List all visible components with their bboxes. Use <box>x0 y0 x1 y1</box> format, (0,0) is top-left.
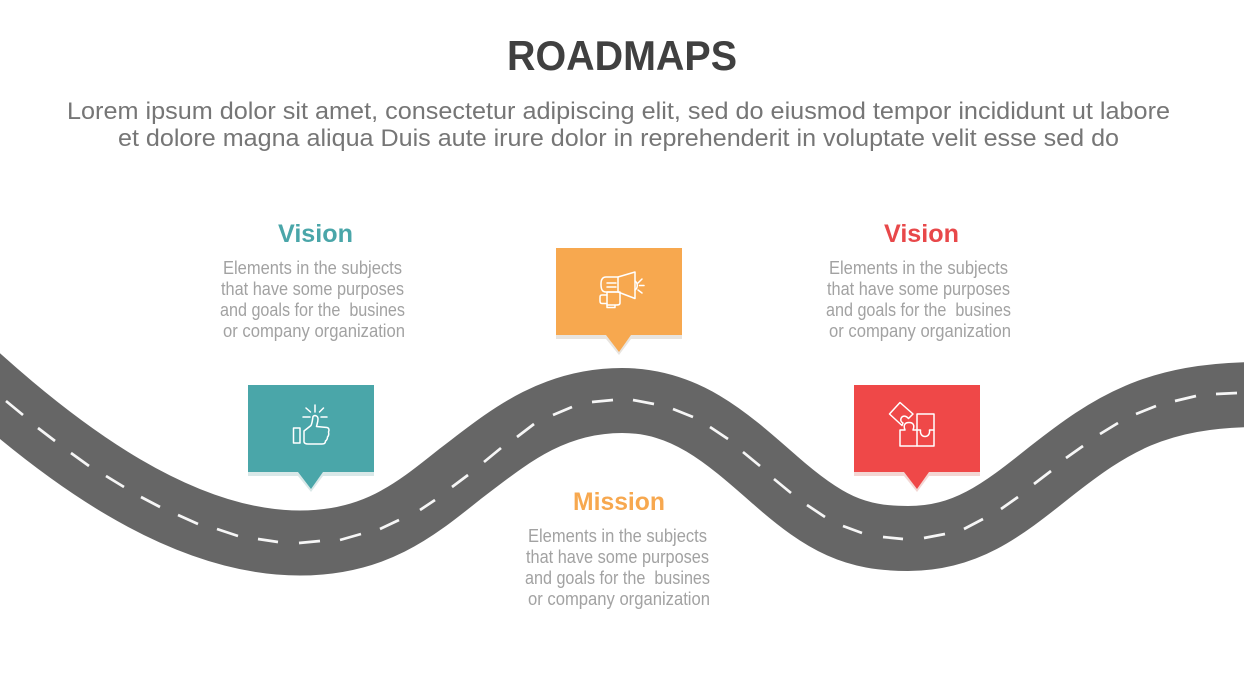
icon: thumbs up <box>294 405 329 444</box>
winding road <box>0 370 1244 543</box>
panel: mission text <box>525 488 710 609</box>
subtitle text block: Lorem ipsum dolor sit amet, consectetur adipiscing elit, sed do eiusmod tempor incididunt ut labore <box>67 98 1170 125</box>
left vision body text: and goals for the busines <box>220 300 405 320</box>
mission body text: Elements in the subjects <box>528 526 707 546</box>
mission body text <box>525 526 710 609</box>
heading: left vision: Vision <box>278 220 353 248</box>
heading: mission: Mission <box>573 488 665 516</box>
callout: red marker <box>854 385 980 492</box>
panel: right vision text <box>826 220 1011 341</box>
right vision body text <box>826 258 1011 341</box>
panel: left vision text <box>220 220 405 341</box>
callout: teal marker <box>248 385 374 492</box>
left vision body text: Elements in the subjects <box>223 258 402 278</box>
right vision body text: and goals for the busines <box>826 300 1011 320</box>
title: ROADMAPS <box>507 32 737 79</box>
icon: puzzle pieces <box>890 402 934 446</box>
left vision body text: that have some purposes <box>221 279 404 299</box>
mission body text: and goals for the busines <box>525 568 710 588</box>
subtitle text block <box>67 98 1170 152</box>
subtitle text block: et dolore magna aliqua Duis aute irure dolor in reprehenderit in voluptate velit esse sed do <box>118 125 1119 152</box>
left vision body text <box>220 258 405 341</box>
right vision body text: that have some purposes <box>827 279 1010 299</box>
right vision body text: Elements in the subjects <box>829 258 1008 278</box>
callout: orange marker <box>556 248 682 355</box>
icon: megaphone <box>600 272 644 308</box>
right vision body text: or company organization <box>829 321 1011 341</box>
heading: right vision: Vision <box>884 220 959 248</box>
mission body text: or company organization <box>528 589 710 609</box>
mission body text: that have some purposes <box>526 547 709 567</box>
left vision body text: or company organization <box>223 321 405 341</box>
